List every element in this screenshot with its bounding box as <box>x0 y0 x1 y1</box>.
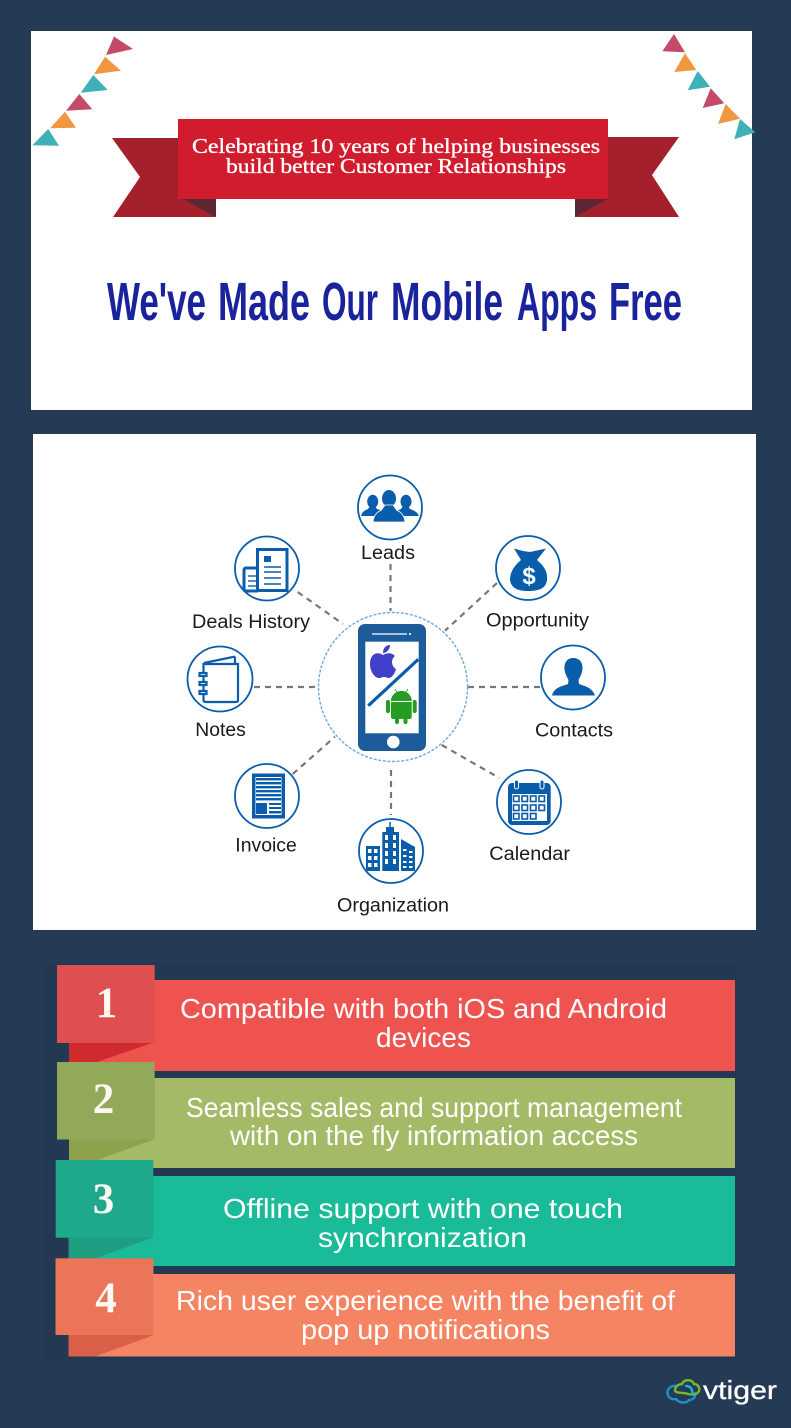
title: We've <box>107 272 206 332</box>
node: Leads <box>358 476 422 564</box>
node: Contacts <box>535 646 613 742</box>
title: Free <box>609 272 682 332</box>
node: Invoice <box>235 764 299 856</box>
title: Mobile <box>391 272 503 332</box>
connectors <box>254 564 541 815</box>
number 4: 4 <box>95 1275 117 1322</box>
benefit 3 text: synchronization <box>318 1222 527 1253</box>
number 3: 3 <box>93 1176 114 1223</box>
label: Opportunity: Opportunity <box>486 610 590 632</box>
icon: invoice <box>252 774 285 818</box>
title: Our <box>322 272 378 332</box>
ribbon text: build better Customer Relationships <box>226 154 566 178</box>
icon: calendar <box>508 780 551 825</box>
icon: person <box>552 658 595 696</box>
number 2: 2 <box>93 1076 114 1123</box>
label: Invoice: Invoice <box>235 836 297 856</box>
benefit 1 text: Compatible with both iOS and Android <box>180 993 667 1024</box>
icon: android <box>386 689 417 724</box>
panel: numbered benefits <box>43 963 738 1362</box>
label: Deals History: Deals History <box>192 612 311 633</box>
icon: money bag: $ <box>522 563 536 590</box>
benefit 2 text <box>186 1092 682 1151</box>
logo: vtiger <box>667 1375 777 1405</box>
panel: header <box>31 31 755 410</box>
icon: documents <box>244 550 287 591</box>
benefit 1 text: devices <box>376 1022 471 1053</box>
label: Notes: Notes <box>195 720 246 741</box>
ribbon text <box>192 134 600 178</box>
benefit 3 text: Offline support with one touch <box>223 1193 623 1224</box>
node: Notes <box>188 646 252 741</box>
benefit 2 <box>57 1062 735 1168</box>
label: Calendar: Calendar <box>489 844 571 865</box>
benefit 3 <box>56 1160 735 1266</box>
node: Organization <box>337 819 449 916</box>
icon: people <box>361 490 419 522</box>
bunting: left <box>32 36 133 146</box>
icon: notebook <box>200 657 238 702</box>
benefit 4 text: pop up notifications <box>301 1314 550 1345</box>
node: Deals History <box>192 536 311 633</box>
icon: buildings <box>366 822 415 871</box>
number 1: 1 <box>96 980 117 1027</box>
benefit 4 text: Rich user experience with the benefit of <box>176 1285 675 1316</box>
label: Leads: Leads <box>361 543 415 564</box>
benefit 4 <box>56 1258 735 1356</box>
benefit 1 text <box>180 993 667 1053</box>
label: Contacts: Contacts <box>535 720 613 742</box>
benefit 3 text <box>223 1193 623 1253</box>
title: Apps <box>517 272 597 332</box>
title: Made <box>218 272 310 332</box>
benefit 1 <box>57 965 735 1071</box>
ribbon banner <box>112 119 679 217</box>
bunting: right <box>662 34 755 139</box>
central phone <box>318 612 468 762</box>
panel: mobile features diagram <box>33 434 756 930</box>
icon: cloud <box>667 1380 699 1403</box>
node: Opportunity <box>486 536 590 632</box>
wordmark: vtiger <box>703 1375 777 1405</box>
node: Calendar <box>489 770 571 865</box>
benefit 2 text: Seamless sales and support management <box>186 1092 682 1123</box>
benefit 2 text: with on the fly information access <box>229 1120 638 1151</box>
ribbon text: Celebrating 10 years of helping businesses <box>192 134 600 158</box>
icon: apple <box>370 645 396 678</box>
label: Organization: Organization <box>337 896 449 916</box>
benefit 4 text <box>176 1285 675 1345</box>
